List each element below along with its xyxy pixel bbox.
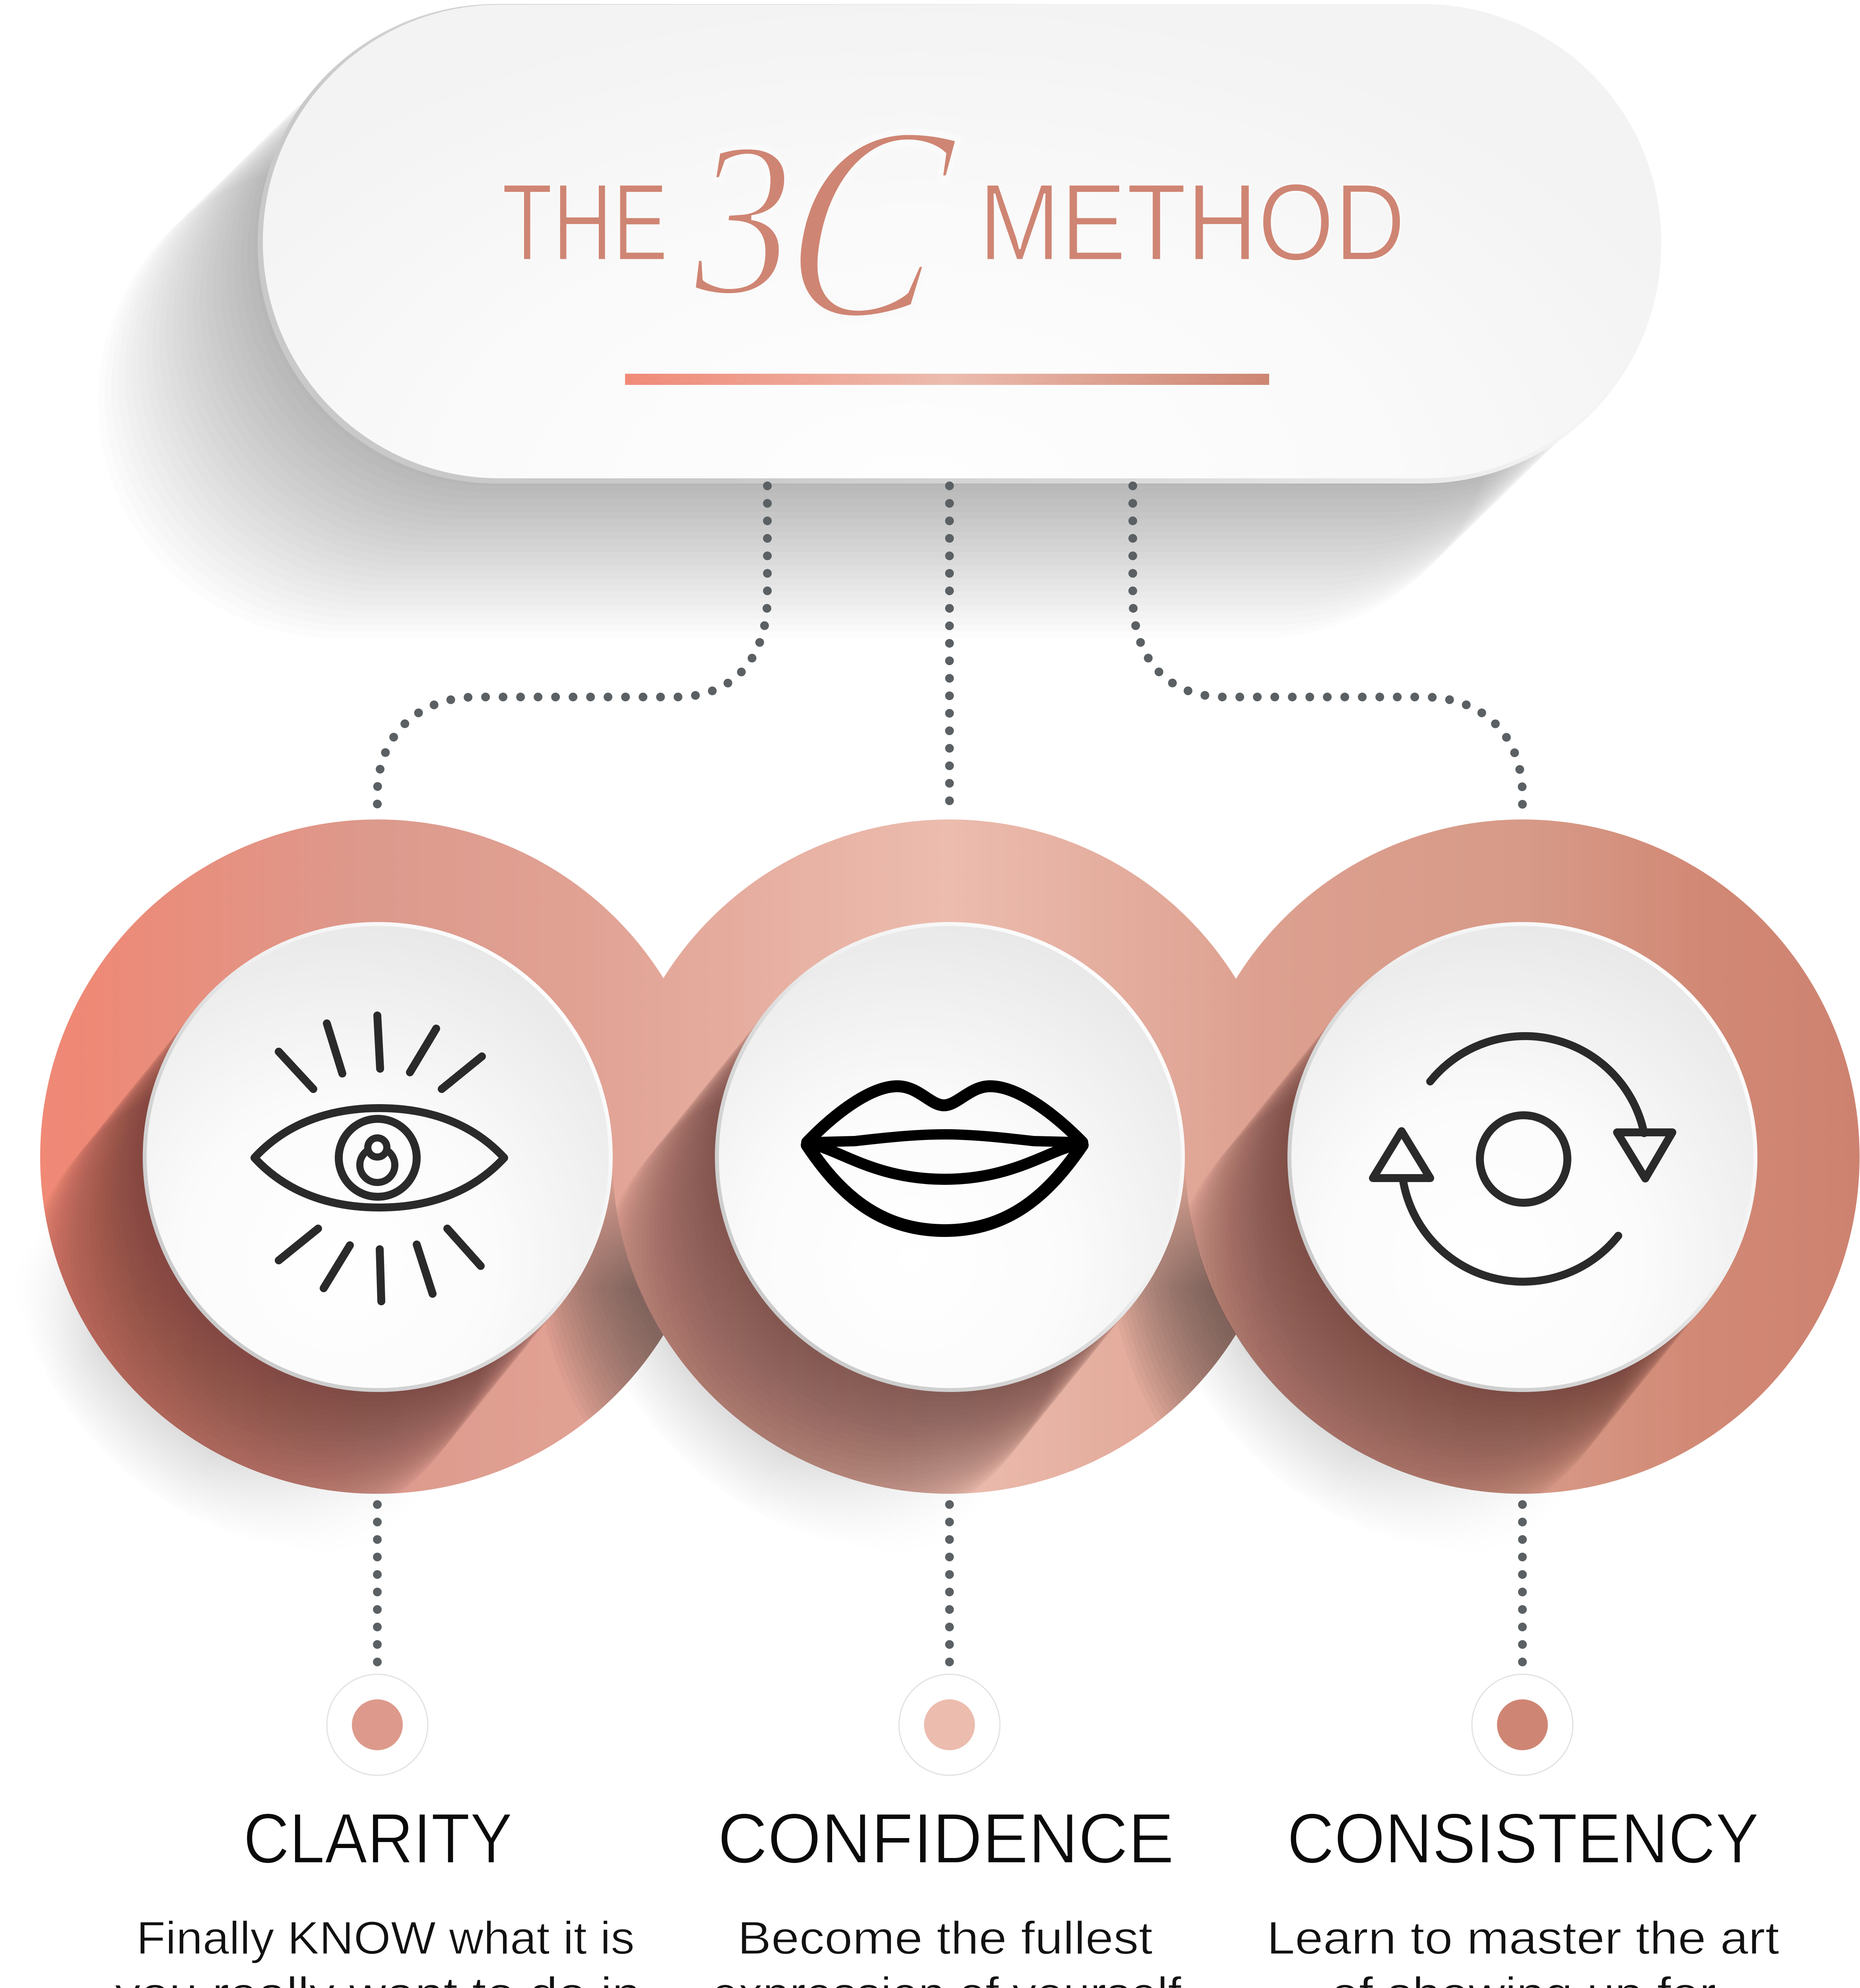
- icon: lips: [807, 1086, 1082, 1231]
- panel: confidence ring: [612, 819, 1287, 1494]
- heading: confidence: CONFIDENCE: [718, 1799, 1174, 1878]
- white disc 3: [1289, 924, 1755, 1390]
- ring 2 shadow over ring 1: [549, 1176, 663, 1419]
- text block: clarity: Finally KNOW what it is: [136, 1912, 635, 1964]
- text block: consistency: Learn to master the art: [1267, 1912, 1779, 1964]
- dotted connectors from circles to markers: [377, 1505, 1522, 1663]
- disc: confidence: [616, 922, 1185, 1494]
- title: METHOD: [979, 161, 1406, 283]
- heading: clarity: CLARITY: [243, 1799, 513, 1878]
- ring 3 shadow over ring 2: [1122, 1176, 1236, 1419]
- pill long shadow: [98, 12, 1654, 638]
- title pill panel: [98, 4, 1661, 638]
- long shadow 2: [592, 928, 1180, 1543]
- title: 3: [691, 97, 793, 342]
- text block: consistency: [1267, 1912, 1779, 1988]
- disc: clarity: [45, 922, 613, 1494]
- panel: clarity ring: [40, 819, 714, 1494]
- pill face: [263, 5, 1661, 478]
- pill rim: [258, 4, 1661, 483]
- marker consistency: [1472, 1674, 1573, 1775]
- icon: cycle arrows: [1373, 1036, 1672, 1282]
- markers: [327, 1674, 1573, 1775]
- title: THE: [502, 161, 668, 283]
- white disc 1: [145, 924, 611, 1390]
- title: [502, 68, 1406, 377]
- text block: clarity: [115, 1912, 641, 1988]
- long shadow 3: [1165, 928, 1753, 1543]
- disc: consistency: [1165, 924, 1755, 1543]
- marker confidence: [899, 1674, 1000, 1775]
- text block: confidence: Become the fullest: [738, 1912, 1153, 1964]
- title: C: [768, 68, 971, 377]
- heading: consistency: CONSISTENCY: [1287, 1799, 1759, 1878]
- dotted connectors from pill to circles: [377, 486, 1522, 818]
- title underline: [625, 374, 1269, 385]
- ring soft shadows: [45, 1257, 1506, 1518]
- white disc 2: [717, 924, 1183, 1390]
- text block: confidence: [712, 1912, 1182, 1988]
- panel: consistency ring: [1185, 819, 1860, 1494]
- long shadow 1: [45, 1022, 549, 1494]
- marker clarity: [327, 1674, 428, 1775]
- icon: eye: [254, 1015, 504, 1301]
